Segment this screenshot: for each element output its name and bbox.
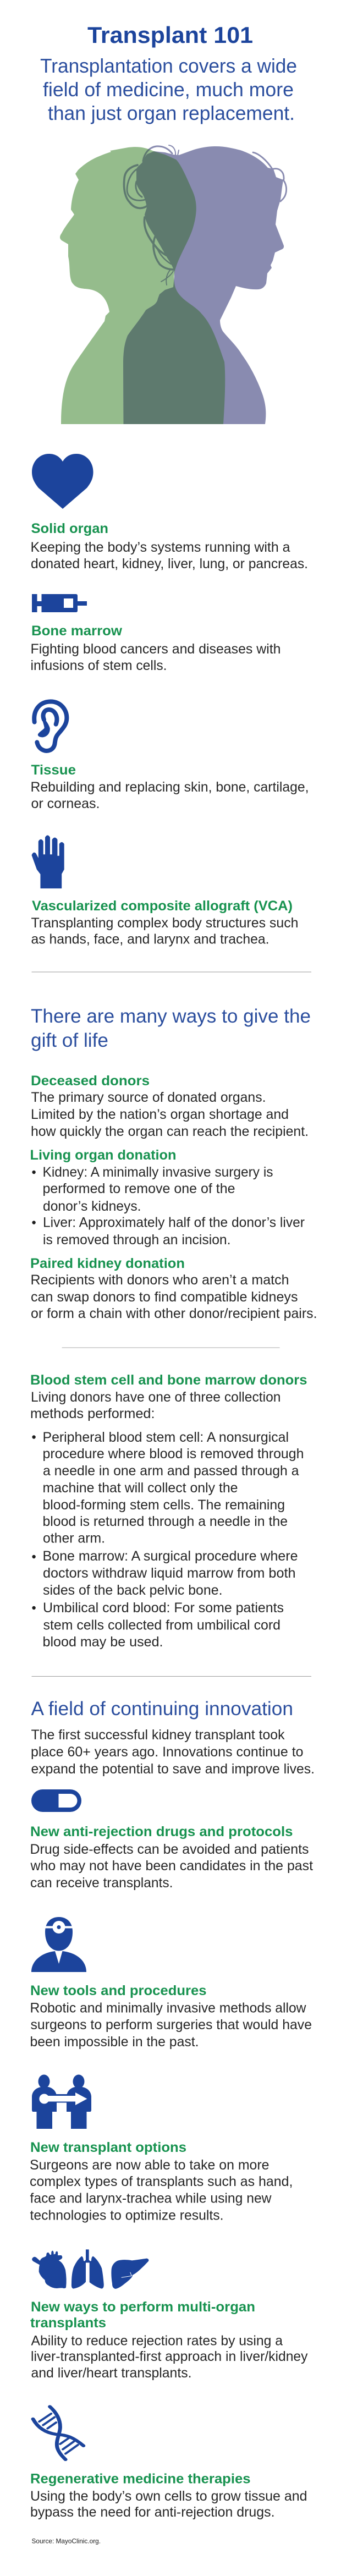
heading: anti-rejection: New anti-rejection drugs and protocols [30, 1824, 293, 1839]
icon: DNA helix [33, 2407, 84, 2459]
heading: VCA: Vascularized composite allograft (VCA) [32, 898, 293, 914]
text: multi-organ: and liver/heart transplants. [31, 2365, 191, 2381]
list: collection methods: Umbilical cord blood: For some patients [43, 1600, 284, 1616]
text: multi-organ [31, 2333, 308, 2381]
text: transplant options [30, 2157, 293, 2223]
text: deceased donors: Limited by the nation’s organ shortage and [31, 1107, 289, 1122]
list: living organ donation: Kidney: A minimally invasive surgery is [43, 1165, 273, 1180]
icon: ear [34, 701, 67, 751]
list: living organ donation: donor’s kidneys. [43, 1199, 141, 1214]
text: regenerative medicine [30, 2489, 307, 2520]
list: collection methods: a needle in one arm and passed through a [43, 1463, 299, 1479]
heading: multi-organ: transplants [30, 2315, 106, 2331]
text: transplant options: technologies to optimize results. [30, 2208, 223, 2223]
text: paired kidney donation [31, 1272, 317, 1321]
text: tissue [31, 779, 309, 811]
list: collection methods: procedure where blood is removed through [43, 1446, 304, 1462]
list: collection methods [32, 1430, 304, 1650]
text: deceased donors [31, 1090, 309, 1139]
list: collection methods: blood-forming stem cells. The remaining [43, 1497, 285, 1513]
text: paired kidney donation: Recipients with donors who aren’t a match [31, 1272, 289, 1288]
heading: many ways to give: gift of life [31, 1030, 108, 1051]
list: living organ donation [32, 1165, 305, 1248]
text: anti-rejection [30, 1842, 313, 1891]
heading: bone marrow: Bone marrow [31, 623, 123, 639]
heading: many ways to give [31, 1006, 311, 1051]
text: tissue: or corneas. [31, 796, 100, 811]
text: tools and procedures: been impossible in the past. [30, 2034, 199, 2050]
text: innovation intro [31, 1727, 315, 1777]
heading: multi-organ [30, 2299, 255, 2331]
text: bone marrow [31, 641, 280, 673]
text: multi-organ: liver-transplanted-first approach in liver/kidney [31, 2349, 308, 2364]
list: collection methods: Peripheral blood stem cell: A nonsurgical [43, 1430, 289, 1445]
panel: blood stem cell and bone marrow donors [30, 1372, 307, 1650]
text: bone marrow: infusions of stem cells. [31, 658, 167, 673]
text: transplant options: Surgeons are now able to take on more [30, 2157, 270, 2173]
text: bone marrow: Fighting blood cancers and diseases with [31, 641, 280, 657]
text: transplant options: face and larynx-trachea while using new [30, 2190, 272, 2206]
panel: types of transplant [31, 454, 309, 947]
text: transplant options: complex types of transplants such as hand, [30, 2174, 293, 2189]
text: regenerative medicine: Using the body’s own cells to grow tissue and [30, 2489, 307, 2504]
list: collection methods: Bone marrow: A surgical procedure where [43, 1548, 298, 1564]
heading: living organ donation: Living organ donation [30, 1147, 176, 1163]
text: deceased donors: how quickly the organ can reach the recipient. [31, 1124, 309, 1139]
list: collection methods: doctors withdraw liquid marrow from both [43, 1566, 296, 1581]
text: solid organ [31, 540, 308, 572]
list: living organ donation: Liver: Approximately half of the donor’s liver [43, 1215, 305, 1230]
list: collection methods: blood may be used. [43, 1634, 163, 1650]
list: collection methods: blood is returned through a needle in the [43, 1514, 288, 1529]
text: VCA: as hands, face, and larynx and trachea. [31, 932, 270, 947]
source note: Source: MayoClinic.org. [32, 2537, 101, 2545]
panel: continuing innovation [30, 1698, 315, 2545]
text: paired kidney donation: can swap donors to find compatible kidneys [31, 1289, 298, 1305]
subtitle [40, 54, 297, 124]
heading: blood stem cell donors: Blood stem cell and bone marrow donors [30, 1372, 307, 1388]
list: living organ donation: is removed through an incision. [43, 1232, 231, 1248]
text: solid organ: Keeping the body’s systems running with a [31, 540, 290, 555]
text: anti-rejection: can receive transplants. [30, 1875, 173, 1891]
list: collection methods: stem cells collected from umbilical cord [43, 1618, 280, 1633]
icon: surgeon [31, 1917, 86, 1972]
text: tools and procedures [30, 2000, 312, 2050]
heading: tools and procedures: New tools and procedures [30, 1983, 207, 1998]
panel: ways to give [30, 1006, 317, 1321]
heading: paired kidney donation: Paired kidney donation [30, 1256, 185, 1271]
list: collection methods: sides of the back pelvic bone. [43, 1583, 222, 1598]
subtitle: field of medicine, much more [43, 78, 294, 101]
text: VCA [31, 915, 298, 947]
icon: capsule [31, 1789, 81, 1812]
text: deceased donors: The primary source of donated organs. [31, 1090, 266, 1105]
heading: deceased donors: Deceased donors [31, 1073, 150, 1089]
title: Transplant 101 [87, 22, 253, 48]
text: collection methods intro: methods performed: [30, 1406, 155, 1421]
text: innovation intro: place 60+ years ago. Innovations continue to [31, 1744, 304, 1760]
subtitle: than just organ replacement. [48, 102, 295, 124]
text: innovation intro: The first successful kidney transplant took [31, 1727, 285, 1743]
icon: hand [32, 836, 64, 888]
subtitle: Transplantation covers a wide [40, 54, 297, 77]
heading: solid organ: Solid organ [31, 521, 108, 536]
text: tissue: Rebuilding and replacing skin, bone, cartilage, [31, 779, 309, 795]
text: collection methods intro: Living donors have one of three collection [31, 1389, 280, 1405]
heading: transplant options: New transplant options [30, 2140, 186, 2155]
text: tools and procedures: Robotic and minimally invasive methods allow [30, 2000, 306, 2015]
text: VCA: Transplanting complex body structures such [31, 915, 298, 931]
heading: many ways to give: There are many ways to give the [31, 1006, 311, 1027]
list: living organ donation: performed to remove one of the [43, 1181, 235, 1196]
icon: heart [32, 454, 94, 509]
list: collection methods: other arm. [43, 1530, 105, 1546]
heading: multi-organ: New ways to perform multi-organ [31, 2299, 255, 2315]
text: innovation intro: expand the potential to save and improve lives. [31, 1761, 315, 1777]
illustration: overlapping man and woman silhouettes [60, 145, 287, 424]
text: anti-rejection: who may not have been candidates in the past [30, 1858, 313, 1874]
heading: tissue: Tissue [31, 762, 76, 778]
icon: syringe [32, 594, 87, 612]
list: collection methods: machine that will collect only the [43, 1480, 238, 1496]
text: multi-organ: Ability to reduce rejection rates by using a [31, 2333, 283, 2349]
text: regenerative medicine: bypass the need for anti-rejection drugs. [30, 2504, 275, 2520]
heading: regenerative medicine: Regenerative medicine therapies [30, 2471, 251, 2486]
icon: two people with transfer arrow [32, 2075, 91, 2129]
text: tools and procedures: surgeons to perform surgeries that would have [31, 2017, 312, 2033]
heading: field of continuing innovation: A field of continuing innovation [31, 1698, 293, 1720]
text: paired kidney donation: or form a chain with other donor/recipient pairs. [31, 1306, 317, 1321]
text: anti-rejection: Drug side-effects can be avoided and patients [30, 1842, 309, 1857]
text: collection methods intro [30, 1389, 280, 1421]
text: solid organ: donated heart, kidney, liver, lung, or pancreas. [31, 556, 308, 572]
icon: heart, lungs and liver [32, 2249, 148, 2289]
